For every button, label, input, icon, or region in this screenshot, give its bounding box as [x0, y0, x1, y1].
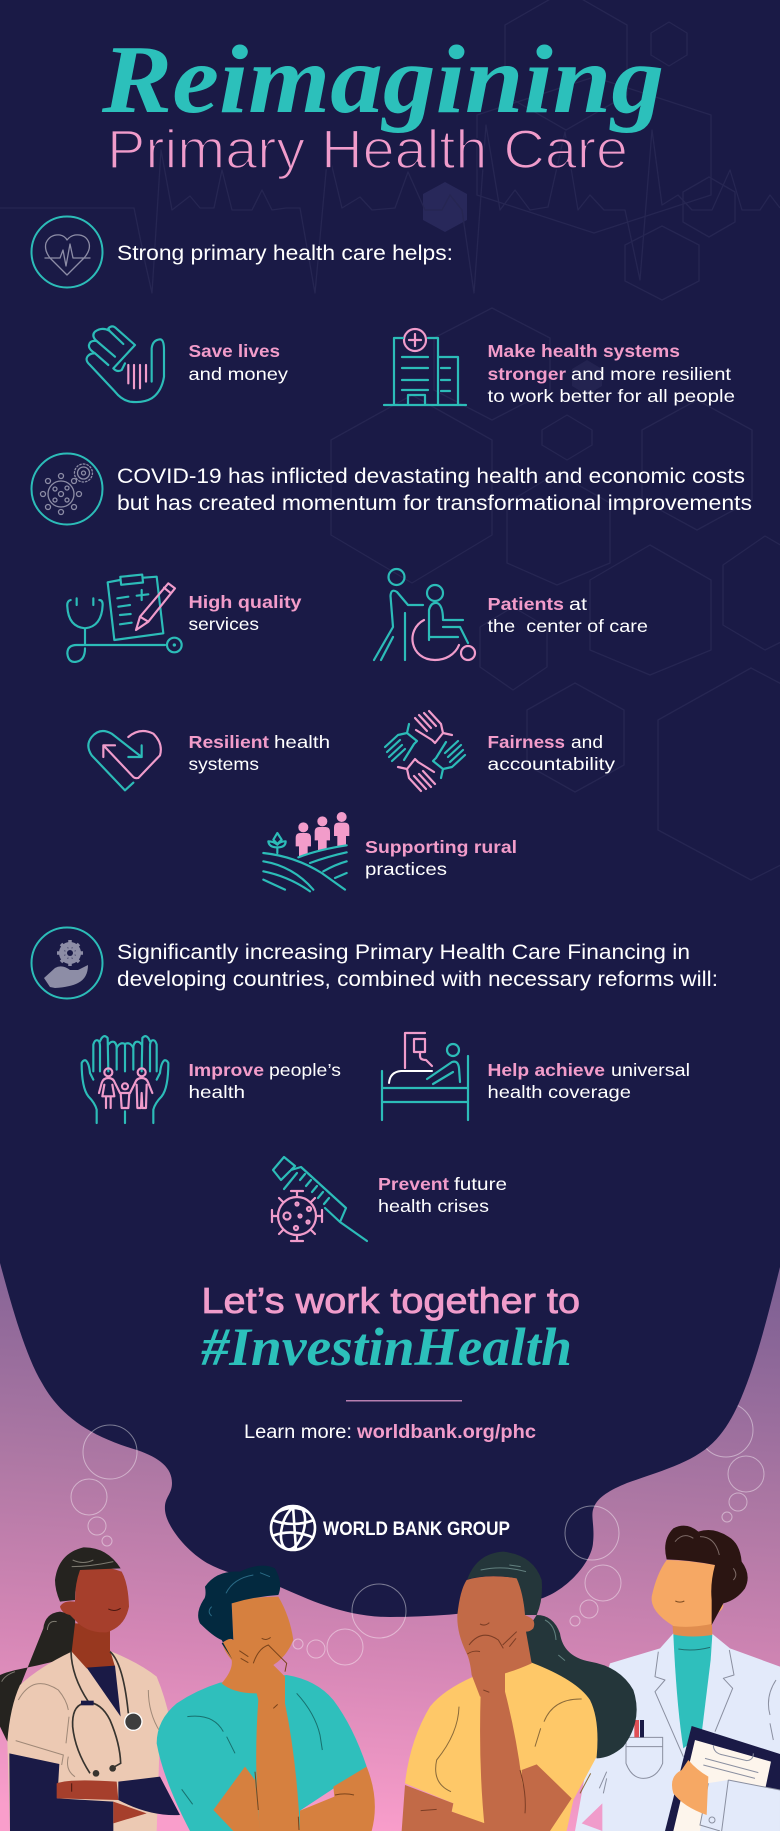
section: covid-19	[32, 454, 752, 891]
item: rural: Supporting rural	[365, 837, 517, 857]
icon: patient in wheelchair	[374, 569, 475, 660]
heading	[117, 941, 718, 991]
item: save lives: and money	[188, 364, 288, 384]
bottom gradient background	[0, 1240, 780, 1831]
item: resilient: Resilient	[188, 732, 269, 752]
item: patients	[374, 569, 648, 660]
icon: patient in bed	[382, 1033, 468, 1120]
item: prevent	[272, 1157, 507, 1241]
item: fairness: Fairness	[488, 732, 565, 752]
icon: caring hand	[87, 326, 164, 402]
logo: world bank group	[271, 1504, 510, 1552]
heading: but has created momentum for transformational improvements	[117, 492, 752, 515]
item: patients: at	[569, 594, 587, 614]
item: universal coverage: Help achieve	[488, 1060, 605, 1080]
item: resilient: health	[274, 732, 330, 752]
title: Reimagining	[101, 26, 664, 134]
title: Primary Health Care	[107, 119, 628, 180]
call to action	[200, 1280, 580, 1377]
item: improve	[82, 1036, 341, 1123]
section: financing	[32, 928, 718, 1241]
item: fairness: and	[571, 732, 603, 752]
item: high quality: services	[188, 614, 259, 634]
item: make health systems stronger: stronger	[488, 364, 566, 384]
item: resilient	[88, 731, 330, 790]
logo: world bank group: WORLD BANK GROUP	[323, 1518, 510, 1540]
icon: people on farmland	[263, 812, 349, 891]
icon: four joined hands	[385, 711, 465, 791]
learn more link: Learn more:	[244, 1422, 352, 1443]
heading: Strong primary health care helps:	[117, 242, 453, 265]
call to action: #InvestinHealth	[200, 1317, 572, 1377]
icon: gear on hand in circle	[32, 928, 102, 998]
icon: hospital	[384, 329, 466, 405]
item: fairness: accountability	[488, 754, 615, 774]
section: strong primary health care helps	[32, 216, 735, 406]
illustration: man in teal	[157, 1566, 375, 1831]
learn more link: worldbank.org/phc	[356, 1422, 536, 1443]
item: universal coverage: health coverage	[488, 1082, 631, 1102]
item: make health systems stronger: and more resilient	[571, 364, 731, 384]
call to action: Let’s work together to	[202, 1280, 580, 1321]
icon: clipboard and stethoscope	[67, 575, 182, 662]
heading	[117, 465, 752, 515]
thought bubbles	[71, 1425, 764, 1665]
item: rural	[263, 812, 517, 891]
item: high quality	[67, 575, 302, 662]
item: improve: health	[188, 1082, 245, 1102]
item: improve: people’s	[269, 1060, 341, 1080]
illustration: doctor with coat on the right	[575, 1526, 780, 1831]
item: patients: Patients	[488, 594, 564, 614]
icon: heart in circle	[32, 216, 102, 288]
item: rural: practices	[365, 859, 447, 879]
item: make health systems stronger: to work better for all people	[488, 386, 735, 406]
icon: hands around family	[82, 1036, 168, 1123]
heading: Significantly increasing Primary Health Care Financing in	[117, 941, 690, 964]
item: resilient: systems	[188, 754, 259, 774]
heading: developing countries, combined with necessary reforms will:	[117, 968, 718, 991]
item: prevent: health crises	[378, 1196, 489, 1216]
dark blob over gradient	[0, 1240, 780, 1617]
learn more link	[244, 1422, 536, 1443]
item: save lives	[87, 326, 288, 402]
heading: COVID-19 has inflicted devastating health and economic costs	[117, 465, 745, 488]
item: high quality: High quality	[188, 592, 302, 612]
item: fairness	[385, 711, 615, 791]
item: make health systems stronger	[384, 329, 735, 406]
item: universal coverage: universal	[611, 1060, 690, 1080]
illustration: woman in yellow	[402, 1552, 637, 1831]
item: prevent: future	[454, 1174, 507, 1194]
icon: heart arrows	[88, 731, 161, 790]
title	[101, 26, 664, 180]
item: prevent: Prevent	[378, 1174, 449, 1194]
icon: syringe and virus	[272, 1157, 367, 1241]
item: patients: the center of care	[488, 616, 648, 636]
item: improve: Improve	[188, 1060, 264, 1080]
item: universal coverage	[382, 1033, 690, 1120]
icon: virus in circle	[32, 454, 102, 524]
illustration: doctor with stethoscope	[0, 1547, 180, 1831]
item: make health systems stronger: Make health systems	[488, 341, 680, 361]
item: save lives: Save lives	[188, 341, 280, 361]
